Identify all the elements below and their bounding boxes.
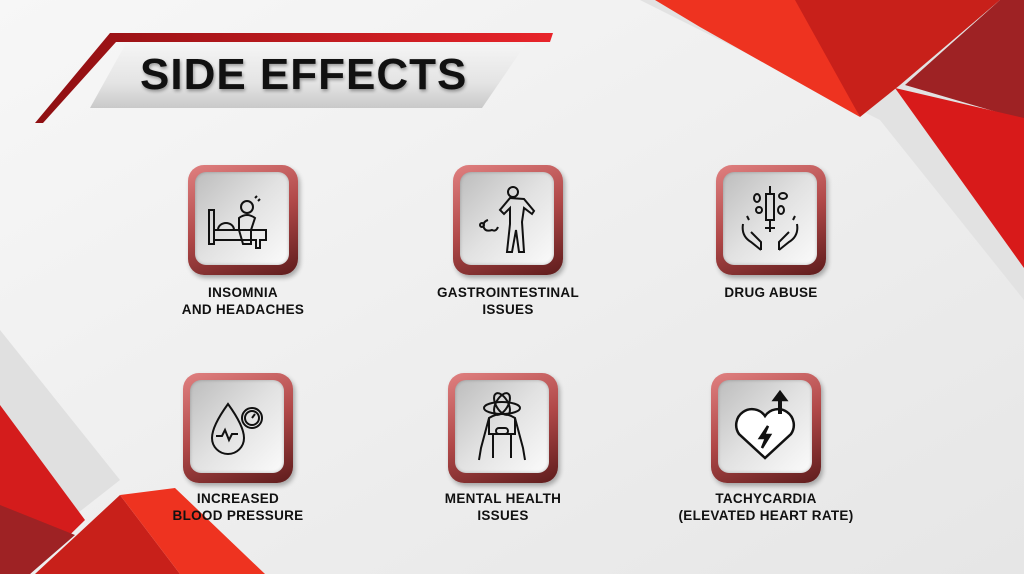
card: gastrointestinal bbox=[453, 165, 563, 275]
label: blood pressure bbox=[173, 491, 303, 523]
icon: hands syringe bbox=[742, 186, 798, 251]
label: mental health: ISSUES bbox=[477, 508, 529, 523]
icon: person gas bbox=[479, 186, 536, 253]
icon: heart bolt bbox=[734, 390, 796, 460]
label: tachycardia bbox=[678, 491, 854, 523]
label: gastrointestinal: GASTROINTESTINAL bbox=[437, 285, 579, 300]
label: drug abuse: DRUG ABUSE bbox=[724, 285, 818, 300]
icon: drop gauge bbox=[211, 402, 263, 455]
label: mental health bbox=[445, 491, 561, 523]
card: mental health bbox=[448, 373, 558, 483]
label: mental health: MENTAL HEALTH bbox=[445, 491, 561, 506]
card: blood pressure bbox=[183, 373, 293, 483]
label: blood pressure: BLOOD PRESSURE bbox=[173, 508, 303, 523]
label: insomnia bbox=[182, 285, 304, 317]
label: blood pressure: INCREASED bbox=[197, 491, 279, 506]
label: insomnia: INSOMNIA bbox=[208, 285, 278, 300]
label: tachycardia: TACHYCARDIA bbox=[715, 491, 817, 506]
label: gastrointestinal: ISSUES bbox=[482, 302, 534, 317]
label: gastrointestinal bbox=[437, 285, 579, 317]
title banner bbox=[35, 33, 553, 123]
title text: SIDE EFFECTS bbox=[140, 50, 467, 99]
icon: head in hands bbox=[478, 392, 526, 460]
card: insomnia bbox=[188, 165, 298, 275]
label: insomnia: AND HEADACHES bbox=[182, 302, 304, 317]
label: tachycardia: (ELEVATED HEART RATE) bbox=[678, 508, 854, 523]
card: tachycardia bbox=[711, 373, 821, 483]
icon: bed person bbox=[208, 195, 267, 249]
card: drug abuse bbox=[716, 165, 826, 275]
